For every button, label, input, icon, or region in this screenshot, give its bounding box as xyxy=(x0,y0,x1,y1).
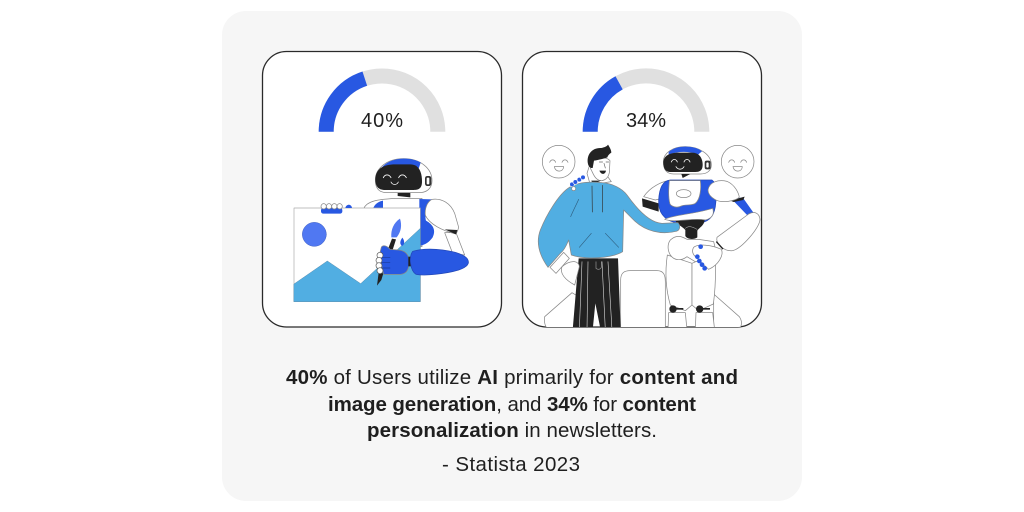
man neck and collar xyxy=(586,166,612,183)
robot face xyxy=(383,175,406,184)
man hoodie with arm xyxy=(538,182,680,267)
robot waist xyxy=(675,218,705,239)
caption line 2: image generation, and 34% for content xyxy=(328,393,696,416)
robot neck xyxy=(398,193,410,198)
robot fingers on man's shoulder xyxy=(570,175,585,187)
robot hand on hip xyxy=(693,245,722,269)
smiley right xyxy=(721,145,754,178)
panel: 40% content and image generation xyxy=(262,52,502,327)
illustration: man with arm around robot xyxy=(538,145,760,330)
man left hand and cuff xyxy=(561,262,579,285)
robot forearm xyxy=(410,249,468,275)
robot shoulder xyxy=(419,199,434,246)
canvas sun xyxy=(302,222,326,246)
robot arm behind man xyxy=(642,198,659,212)
background panel xyxy=(222,11,802,501)
robot pelvis plates xyxy=(668,236,717,262)
robot legs xyxy=(666,253,716,330)
canvas xyxy=(294,208,420,302)
gauge value 40%: 40% xyxy=(361,110,403,132)
illustration: robot painting on a canvas xyxy=(294,159,468,302)
caption line 3: personalization in newsletters. xyxy=(367,419,657,442)
source: - Statista 2023 xyxy=(442,453,580,476)
robot head xyxy=(375,159,432,193)
sofa xyxy=(544,271,742,330)
robot wrist xyxy=(408,257,411,266)
man trousers xyxy=(573,258,621,330)
man head xyxy=(590,158,610,181)
robot knees xyxy=(669,305,710,313)
robot chest xyxy=(659,180,716,223)
gauge value 34%: 34% xyxy=(626,110,666,132)
robot hand xyxy=(379,246,409,274)
robot torso xyxy=(364,198,422,247)
fingers on canvas top xyxy=(321,204,352,214)
gauge: 34 percent xyxy=(590,76,702,132)
man face xyxy=(599,162,609,168)
robot face right xyxy=(671,159,690,169)
canvas mountains xyxy=(294,228,420,302)
gauge: 40 percent xyxy=(326,76,438,132)
card frame left xyxy=(262,52,502,327)
card frame right xyxy=(522,52,762,327)
caption line 1: 40% of Users utilize AI primarily for content and xyxy=(286,366,738,389)
panel: 34% content personalization xyxy=(522,52,762,330)
robot upper arm xyxy=(445,233,465,255)
robot head xyxy=(663,147,711,174)
robot arm right xyxy=(734,197,754,215)
caption xyxy=(286,366,738,442)
man hair xyxy=(588,145,611,168)
smiley left xyxy=(542,145,575,178)
paint brush xyxy=(377,219,404,286)
